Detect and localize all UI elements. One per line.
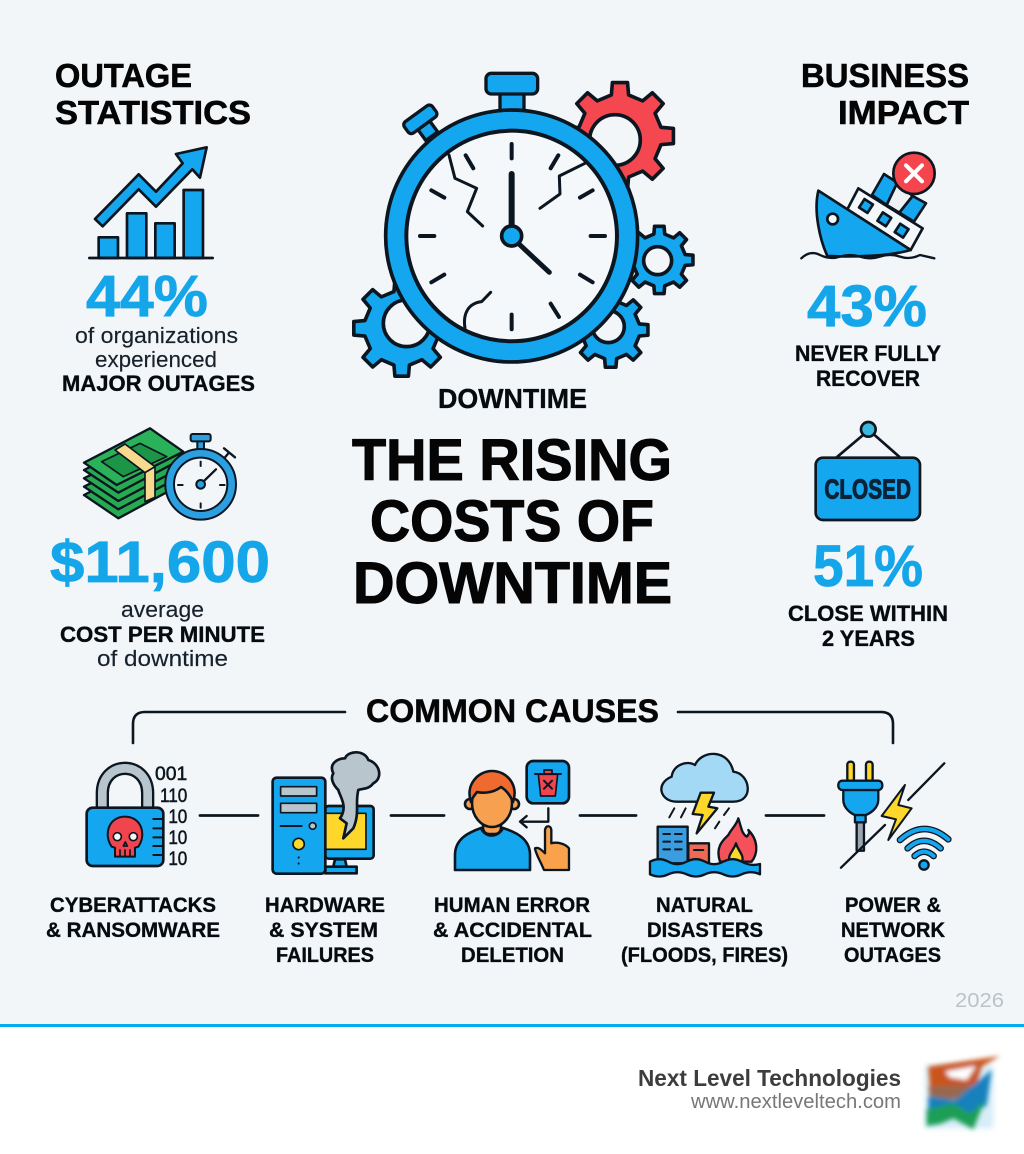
stat: 44 percent major outages: 44%: [86, 264, 208, 329]
icon: top button: [486, 73, 538, 113]
stat: 43 percent never recover: RECOVER: [816, 366, 920, 391]
heading: business impact: BUSINESS: [801, 57, 969, 94]
bracket above causes: [133, 712, 893, 743]
icon: plug lightning and wifi: [838, 762, 948, 870]
label: natural disasters: (FLOODS, FIRES): [621, 943, 788, 967]
icon: cracked stopwatch with gears: [354, 73, 693, 376]
icon: rising bar chart with arrow: [89, 147, 213, 258]
website: www.nextleveltech.com: [690, 1091, 901, 1113]
heading: common causes: COMMON CAUSES: [366, 693, 659, 729]
stat: 11,600 dollars cost per minute: average: [121, 597, 204, 622]
stat: 11,600 dollars cost per minute: of downtime: [97, 646, 228, 671]
label: hardware failures: & SYSTEM: [269, 918, 378, 942]
stat: 11,600 dollars cost per minute: COST PER MINUTE: [60, 622, 265, 647]
stat: 11,600 dollars cost per minute: $11,600: [50, 530, 270, 595]
icon: failing computer with smoke: [273, 752, 379, 874]
icon: bottom right blue gear: [573, 293, 648, 367]
icon: red gear: [567, 83, 673, 189]
label: hardware failures: HARDWARE: [265, 893, 385, 917]
label: human error: DELETION: [461, 943, 564, 967]
label: cyberattacks: CYBERATTACKS: [50, 893, 216, 917]
label: natural disasters: NATURAL: [656, 893, 753, 917]
clock hands: [502, 174, 549, 272]
icon: bottom left blue gear: [354, 280, 450, 376]
stat: 51 percent close within two years: [788, 534, 948, 651]
clock ticks: [420, 144, 605, 329]
stat: 51 percent close within two years: 51%: [813, 534, 923, 599]
person body: [455, 828, 530, 870]
label: hardware failures: FAILURES: [276, 943, 374, 967]
title: COSTS OF: [370, 489, 654, 554]
label: human error: [433, 893, 592, 967]
clock cracks: [449, 155, 585, 328]
stat: 43 percent never recover: 43%: [807, 274, 927, 339]
label: power and network: OUTAGES: [844, 943, 941, 967]
icon: closed sign: [816, 422, 920, 520]
heading: business impact: [801, 57, 969, 131]
icon: closed sign: CLOSED: [824, 473, 911, 504]
label: natural disasters: DISASTERS: [647, 918, 763, 942]
heading: outage statistics: [55, 57, 251, 131]
footer panel: [0, 1024, 1024, 1154]
connectors between causes: [200, 814, 824, 817]
label: human error: & ACCIDENTAL: [433, 918, 592, 942]
stat: 44 percent major outages: experienced: [95, 347, 217, 372]
icon: money stack and stopwatch: [84, 428, 236, 520]
heading: outage statistics: OUTAGE: [55, 57, 192, 94]
label: cyberattacks: & RANSOMWARE: [46, 918, 220, 942]
stat: 44 percent major outages: [62, 264, 255, 396]
logo: [925, 1056, 1000, 1129]
year: 2026: [955, 990, 1004, 1012]
label: power and network: POWER &: [845, 893, 941, 917]
label: power and network: [841, 893, 945, 967]
stat: 51 percent close within two years: CLOSE WITHIN: [788, 601, 948, 626]
center label: downtime: DOWNTIME: [438, 383, 587, 414]
icon: sinking ship: [801, 153, 935, 258]
label: natural disasters: [621, 893, 788, 967]
label: cyberattacks: [46, 893, 220, 942]
icon: padlock with skull and binary: 10: [168, 849, 187, 870]
stat: 43 percent never recover: NEVER FULLY: [795, 341, 941, 366]
label: human error: HUMAN ERROR: [434, 893, 590, 917]
title: [352, 428, 672, 616]
stat: 51 percent close within two years: 2 YEARS: [822, 626, 915, 651]
icon: padlock with skull and binary: 110: [160, 786, 187, 807]
label: power and network: NETWORK: [841, 918, 945, 942]
icon: padlock with skull and binary: 10: [168, 807, 187, 828]
heading: outage statistics: STATISTICS: [55, 94, 251, 131]
label: hardware failures: [265, 893, 385, 967]
heading: business impact: IMPACT: [838, 94, 969, 131]
stat: 11,600 dollars cost per minute: [50, 530, 270, 671]
icon: person with deleted file: [455, 761, 569, 870]
clock ring and face: [386, 110, 638, 362]
icon: storm flood and fire: [650, 754, 760, 876]
stat: 44 percent major outages: MAJOR OUTAGES: [62, 371, 255, 396]
icon: right blue gear: [626, 226, 693, 294]
company name: Next Level Technologies: [638, 1065, 901, 1091]
icon: padlock with skull and binary: [87, 764, 187, 870]
trash tile, arrow and pointing hand: [520, 761, 569, 870]
icon: padlock with skull and binary: 001: [155, 764, 187, 785]
icon: side button: [402, 103, 446, 146]
stat: 43 percent never recover: [795, 274, 941, 391]
stat: 44 percent major outages: of organizations: [75, 323, 238, 348]
title: DOWNTIME: [353, 551, 672, 616]
person head: [465, 771, 519, 834]
title: THE RISING: [352, 428, 672, 493]
icon: padlock with skull and binary: 10: [168, 828, 187, 849]
